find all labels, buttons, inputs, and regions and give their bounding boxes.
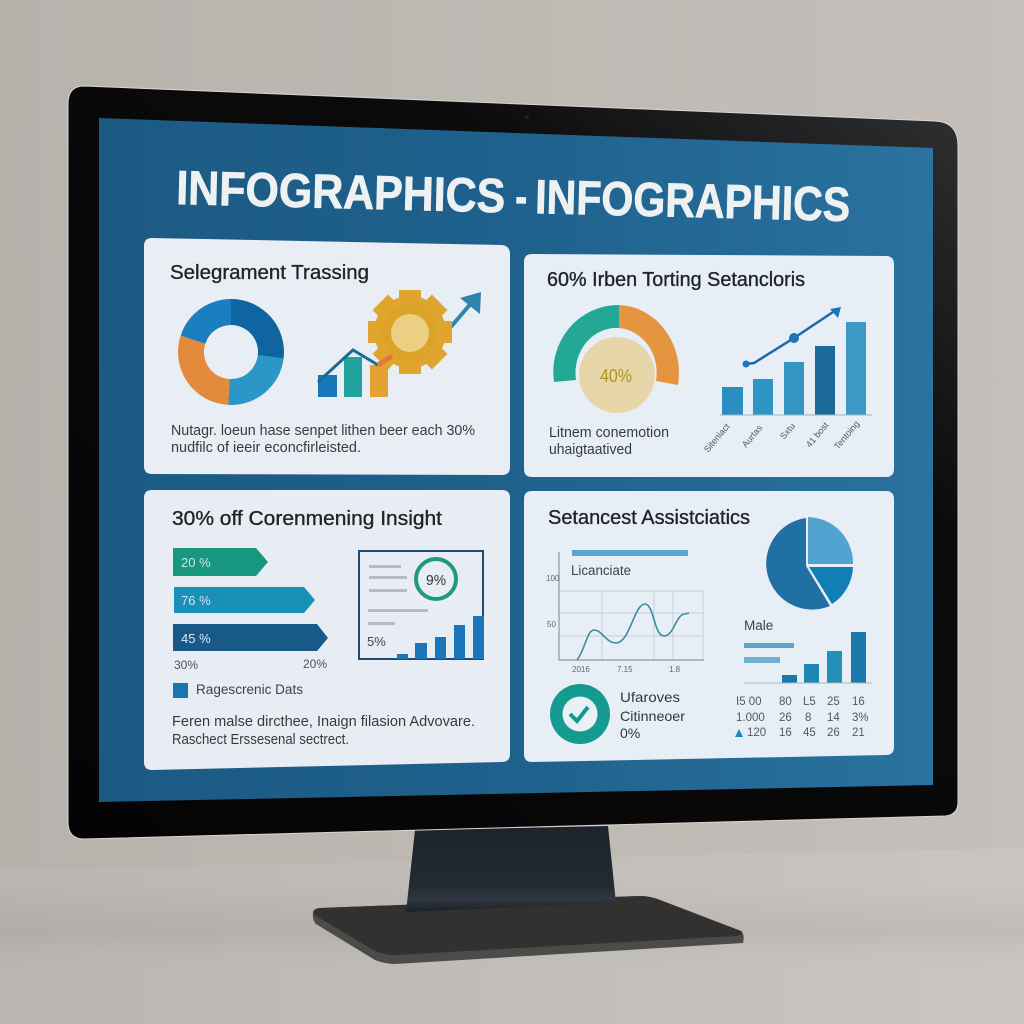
rotated axis labels: Sxtu bbox=[778, 421, 797, 441]
arrow bars bbox=[173, 548, 328, 672]
panel body text: nudfilc of ieeir econcfirleisted. bbox=[171, 440, 361, 456]
small bar chart: Male bbox=[744, 618, 773, 633]
main title bbox=[176, 162, 851, 232]
icon: gear with growth chart and arrow bbox=[318, 290, 481, 397]
panel background bbox=[524, 491, 894, 762]
data table: 14 bbox=[827, 712, 840, 724]
arrow bars: 45 % bbox=[181, 631, 211, 646]
panel background bbox=[144, 238, 510, 475]
panel body text: Feren malse dircthee, Inaign filasion Advovare. bbox=[172, 714, 475, 730]
status text: Ufaroves bbox=[620, 689, 680, 705]
arrow bars: 30% bbox=[174, 658, 198, 672]
line chart: 100 bbox=[546, 574, 560, 583]
panel body text: Raschect Erssesenal sectrect. bbox=[172, 732, 349, 748]
line chart: 7.15 bbox=[617, 665, 633, 674]
rotated axis labels bbox=[702, 419, 861, 454]
panel: corenmening insight bbox=[144, 490, 510, 770]
status text: 0% bbox=[620, 725, 640, 741]
panel heading: 60% Irben Torting Setancloris bbox=[547, 269, 805, 291]
data table: 16 bbox=[852, 696, 865, 708]
data table: I5 00 bbox=[736, 696, 762, 708]
mini dashboard: 5% bbox=[367, 634, 386, 649]
data table: 8 bbox=[805, 712, 811, 724]
stand neck bbox=[406, 826, 616, 912]
icon: check badge bbox=[550, 684, 610, 744]
panel heading: Selegrament Trassing bbox=[170, 262, 369, 284]
gauge chart bbox=[553, 305, 679, 413]
line chart bbox=[546, 550, 704, 674]
line chart: 50 bbox=[547, 620, 556, 629]
data table: L5 bbox=[803, 696, 816, 708]
mini dashboard bbox=[359, 551, 484, 659]
pie chart bbox=[766, 517, 853, 610]
small bars bbox=[318, 375, 337, 397]
data table: 26 bbox=[827, 727, 840, 739]
main title: - bbox=[515, 171, 528, 224]
panel: irben testing bbox=[524, 254, 894, 477]
data table: 21 bbox=[852, 727, 865, 739]
monitor frame bbox=[68, 86, 958, 839]
gear bbox=[368, 290, 452, 374]
gauge chart: 40% bbox=[600, 366, 632, 386]
main title: INFOGRAPHICS bbox=[535, 171, 851, 232]
arrow bars: 20 % bbox=[181, 555, 211, 570]
data table: 16 bbox=[779, 727, 792, 739]
panel body text: Nutagr. loeun hase senpet lithen beer each 30% bbox=[171, 423, 475, 439]
rotated axis labels: 41 bost bbox=[804, 420, 831, 449]
data table: 120 bbox=[747, 727, 766, 739]
data table: 3% bbox=[852, 712, 869, 724]
line chart: 1.8 bbox=[669, 665, 681, 674]
mini dashboard: 9% bbox=[426, 572, 446, 589]
arrow bars: 20% bbox=[303, 657, 327, 671]
line chart: Licanciate bbox=[571, 563, 631, 578]
panel body text: uhaigtaatived bbox=[549, 442, 632, 458]
growth arrow bbox=[438, 292, 481, 342]
rotated axis labels: Siteniact bbox=[702, 421, 732, 454]
rotated axis labels: Tentoing bbox=[832, 419, 861, 451]
panel body text: Litnem conemotion bbox=[549, 425, 669, 441]
arrow bars: 76 % bbox=[181, 593, 211, 608]
panel background bbox=[144, 490, 510, 770]
data table: 25 bbox=[827, 696, 840, 708]
desk shadow band bbox=[0, 885, 1024, 970]
stand base bbox=[313, 896, 744, 964]
legend: Ragescrenic Dats bbox=[196, 682, 303, 697]
monitor screen bbox=[99, 118, 933, 802]
status text: Citinneoer bbox=[620, 708, 685, 724]
small bar chart bbox=[744, 618, 872, 683]
rotated axis labels: Aurtas bbox=[740, 423, 765, 449]
data table bbox=[735, 696, 869, 739]
data table: 1.000 bbox=[736, 712, 765, 724]
trend line bbox=[318, 350, 378, 382]
panel body text bbox=[549, 425, 669, 458]
status text bbox=[620, 689, 685, 741]
camera dot bbox=[525, 115, 529, 119]
panel body text bbox=[172, 714, 475, 748]
panel: assistciatics bbox=[524, 491, 894, 762]
panel heading: Setancest Assistciatics bbox=[548, 507, 750, 529]
data table: 80 bbox=[779, 696, 792, 708]
bar chart with trend line bbox=[702, 307, 872, 454]
panel body text bbox=[171, 423, 475, 456]
panel: segment tracing bbox=[144, 238, 510, 475]
data table: 26 bbox=[779, 712, 792, 724]
desk surface bbox=[0, 848, 1024, 1024]
donut chart bbox=[178, 299, 284, 405]
line chart: 2016 bbox=[572, 665, 590, 674]
panel heading: 30% off Corenmening Insight bbox=[172, 508, 442, 530]
monitor stand bbox=[313, 826, 744, 964]
data table: 45 bbox=[803, 727, 816, 739]
main title: INFOGRAPHICS bbox=[176, 162, 506, 223]
panel background bbox=[524, 254, 894, 477]
